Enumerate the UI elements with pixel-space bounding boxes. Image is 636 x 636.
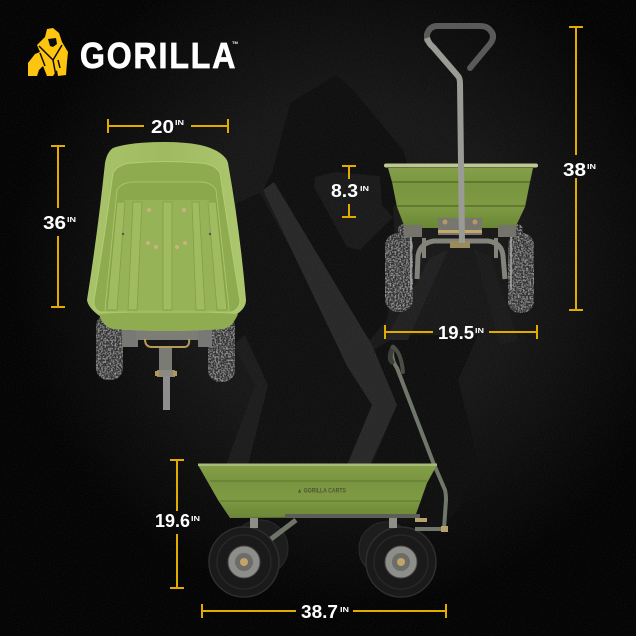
dimension: height 38 in: [563, 27, 596, 310]
dimension: height 19.6 in: [155, 460, 200, 588]
dimension: length 36 in: IN: [67, 215, 76, 224]
dimension: height 38 in: 38: [563, 160, 586, 180]
logo: Gorilla: [28, 28, 238, 76]
wheels: [96, 314, 235, 382]
dimension: width 20 in: IN: [175, 118, 184, 127]
axle frame: [411, 236, 511, 290]
mount bracket: [404, 218, 516, 248]
dimension: length 36 in: 36: [43, 213, 66, 233]
bucket front lip: [99, 312, 238, 331]
wordmark: GORILLA: [80, 36, 237, 76]
bucket outer rim: [87, 142, 246, 331]
frame: [250, 514, 427, 539]
dimension: depth 8.3 in: 8.3: [331, 181, 358, 201]
top view cart: [87, 142, 246, 410]
bucket: [384, 164, 538, 228]
dimension: width 20 in: [108, 117, 228, 137]
icon: gorilla mark: [28, 28, 68, 76]
bucket: [198, 464, 437, 518]
bucket inner wall: [94, 162, 240, 312]
trademark: TM: [232, 40, 238, 45]
wheels: [209, 520, 436, 597]
pull handle: [390, 347, 448, 532]
dimension: depth 8.3 in: [331, 166, 369, 217]
undercarriage and tow handle: [122, 327, 212, 410]
floor bolts: [122, 208, 211, 249]
dimension: height 19.6 in: IN: [191, 514, 200, 523]
dimension: depth 8.3 in: IN: [360, 184, 369, 193]
floor ribs: [107, 202, 227, 310]
side view cart: [198, 347, 448, 597]
dimension: length 38.7 in: IN: [340, 605, 349, 614]
bucket inner step: [105, 182, 229, 310]
dimension: height 19.6 in: 19.6: [155, 511, 190, 531]
T handle: [427, 26, 493, 243]
dimension: width 19.5 in: 19.5: [438, 323, 474, 343]
back view cart: [384, 26, 538, 313]
dimension: height 38 in: IN: [587, 162, 596, 171]
dimension: width 20 in: 20: [151, 117, 174, 137]
bucket floor: [106, 200, 227, 310]
dimension: length 38.7 in: [202, 602, 446, 622]
dimension: length 38.7 in: 38.7: [301, 602, 338, 622]
dimension: width 19.5 in: [385, 323, 537, 343]
dimension: length 36 in: [43, 146, 76, 307]
wheels: [385, 224, 534, 313]
brand badge on bucket: ▲ GORILLA CARTS: [297, 488, 347, 494]
dimension: width 19.5 in: IN: [475, 326, 484, 335]
